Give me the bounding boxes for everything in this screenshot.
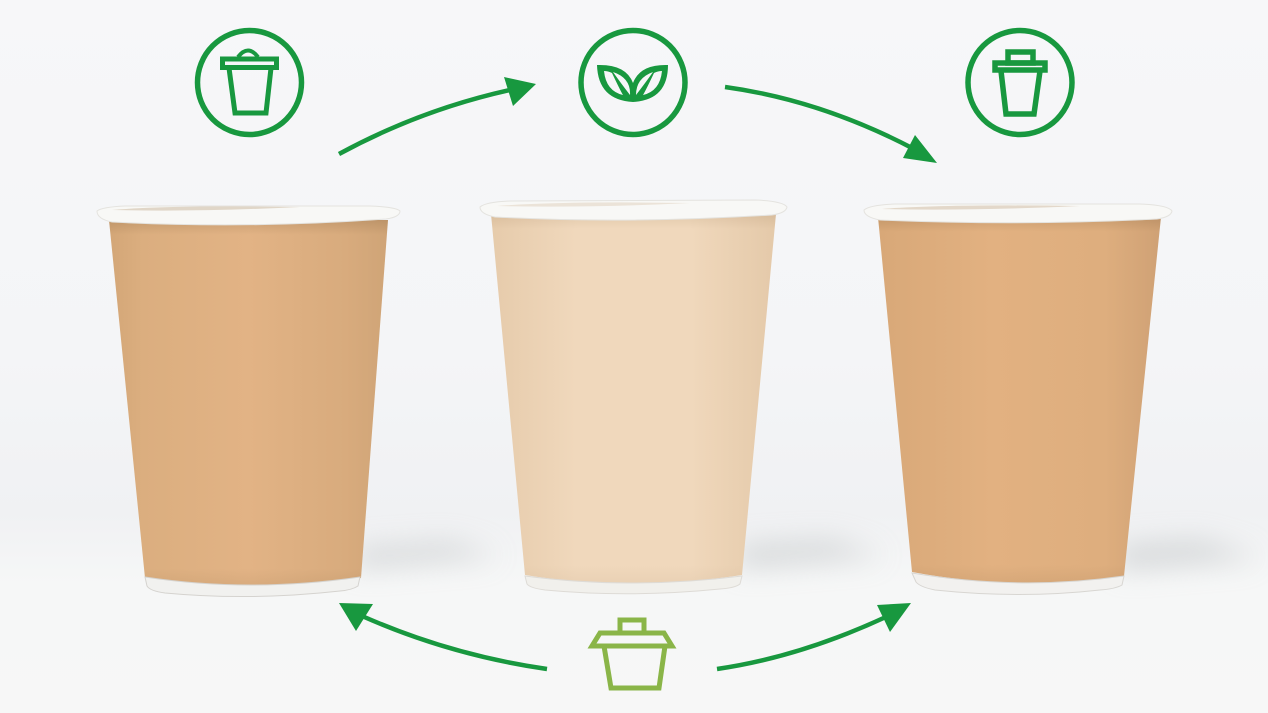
arrow: leaf to right cup — [725, 87, 937, 163]
arrow: left cup to leaf — [339, 77, 536, 154]
icon: round-lid bin in circle — [198, 30, 302, 134]
cup: left — [97, 206, 400, 597]
icon: open-lid bin — [592, 620, 672, 688]
icon: leaves in circle — [581, 30, 685, 134]
arrow: bin to left cup — [339, 603, 547, 669]
cup shadows — [355, 540, 1262, 570]
arrow: bin to right cup — [717, 603, 911, 669]
cup: middle — [480, 200, 787, 594]
cup: right — [864, 204, 1172, 594]
icon: flat-lid bin in circle — [968, 30, 1072, 134]
leaf pair — [597, 65, 668, 102]
